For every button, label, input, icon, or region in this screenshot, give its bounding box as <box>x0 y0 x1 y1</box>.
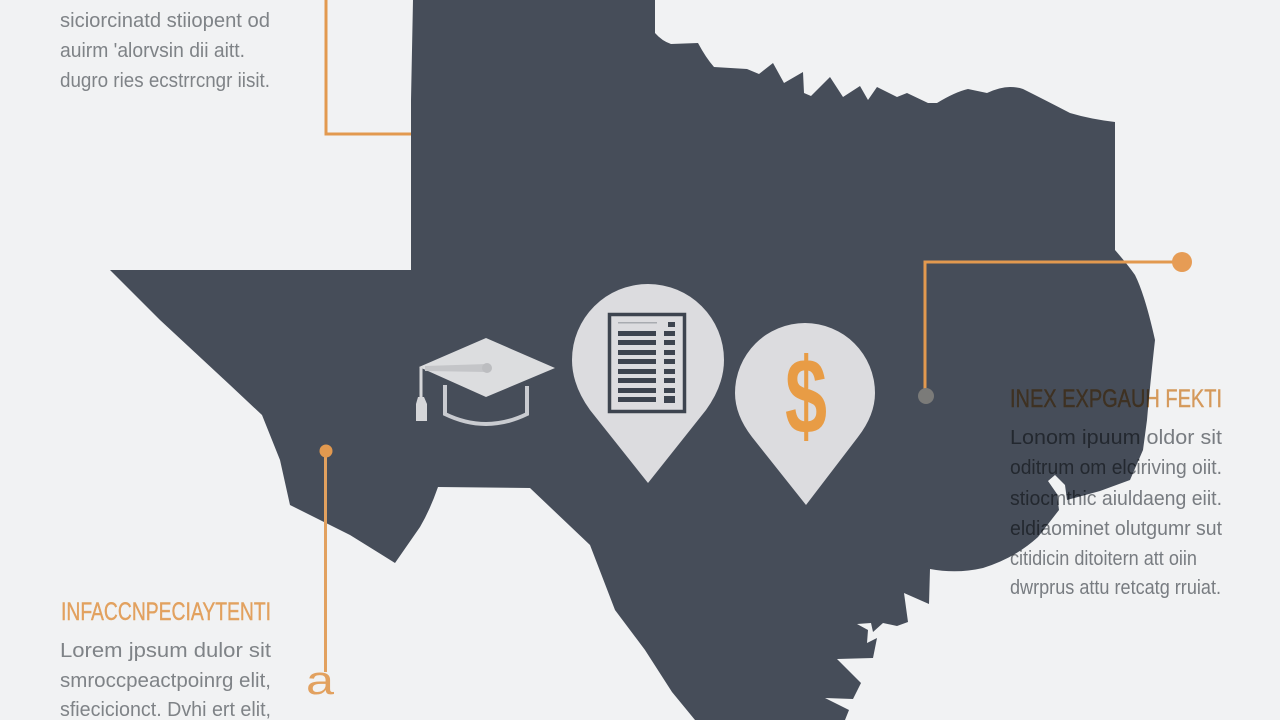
body: right: eldiaominet olutgumr sut <box>1010 518 1222 540</box>
body: right <box>1010 427 1222 599</box>
icon: location pin with document <box>572 284 724 483</box>
icon: location pin with dollar: $ <box>785 336 827 456</box>
heading: bottom-left: INFACCNPECIAYTENTI <box>61 598 271 626</box>
icon: location pin with dollar <box>735 323 875 505</box>
text block: top-left: dugro ries ecstrrcngr iisit. <box>60 70 270 92</box>
document list icon <box>610 314 684 412</box>
text block: bottom-left <box>60 598 271 720</box>
heading: right: INEX EXPGAUH FEKTI <box>1010 385 1222 413</box>
body: right: citidicin ditoitern att oiin <box>1010 548 1197 570</box>
body: right: Lonom ipuum oldor sit <box>1010 427 1222 449</box>
body: bottom-left <box>60 640 271 720</box>
icon: graduation cap <box>416 338 555 424</box>
connector: right orange line with dots <box>918 252 1192 404</box>
connector: bottom-left orange line with dot: a <box>306 659 335 703</box>
body: bottom-left: Lorem jpsum dulor sit <box>60 640 271 662</box>
body: right: oditrum om elciriving oiit. <box>1010 457 1222 479</box>
text block: top-left <box>60 10 270 92</box>
text block: top-left: siciorcinatd stiiopent od <box>60 10 270 32</box>
body: right: stiocmthic aiuldaeng eiit. <box>1010 488 1222 510</box>
text block: right <box>1010 385 1222 599</box>
connector: bottom-left orange line with dot <box>306 444 335 703</box>
connector: top-left orange line <box>326 0 411 134</box>
body: bottom-left: smroccpeactpoinrg elit, <box>60 670 271 692</box>
body: right: dwrprus attu retcatg rruiat. <box>1010 577 1221 599</box>
text block: top-left: auirm 'alorvsin dii aitt. <box>60 40 245 62</box>
